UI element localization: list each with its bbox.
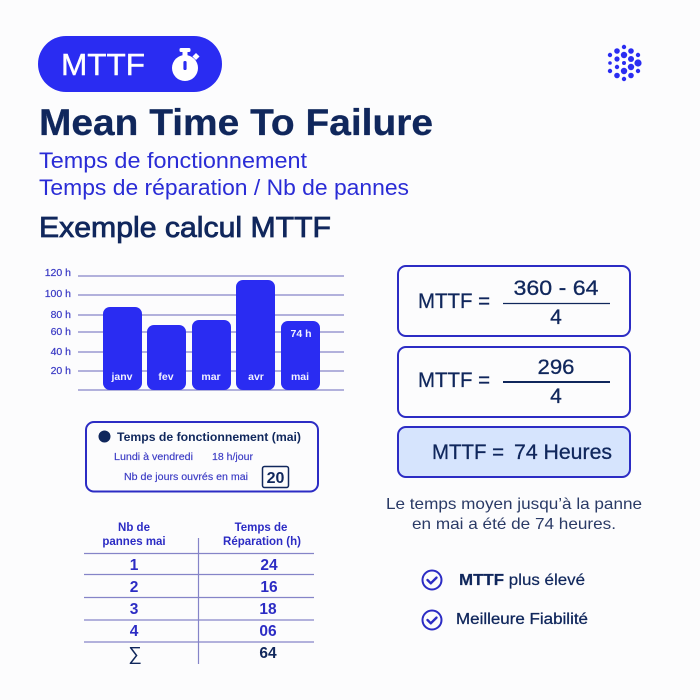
bar chart (45, 267, 344, 390)
chart axis labels: 60 h (51, 326, 71, 338)
conclusion text: en mai a été de 74 heures. (412, 516, 616, 533)
badge: MTTF pill: MTTF (61, 47, 145, 82)
table values: 3 (130, 601, 139, 618)
chart bars (103, 280, 320, 390)
table values: 16 (260, 579, 278, 596)
chart axis labels: 100 h (45, 288, 71, 300)
formula box 1: 360 - 64 (514, 277, 599, 300)
value box: 20: 20 (267, 470, 284, 487)
chart axis labels: 40 h (51, 346, 71, 358)
badge: MTTF pill (38, 36, 222, 92)
panel: operating time: Nb de jours ouvrés en mai (124, 472, 248, 483)
icon: stopwatch (172, 48, 200, 81)
formula box 2 (398, 347, 630, 417)
icon: check (422, 610, 442, 630)
bar labels: mar (201, 371, 221, 383)
table values: 4 (130, 623, 139, 640)
icon: check (422, 570, 442, 590)
panel: operating time: Temps de fonctionnement (mai) (117, 430, 301, 444)
bar labels (110, 328, 312, 383)
benefit: higher MTTF: MTTF plus élevé (459, 572, 585, 589)
table values: 64 (259, 645, 277, 662)
formula box 2: MTTF = (418, 369, 490, 392)
table header: Réparation (h) (223, 536, 301, 548)
subtitle: Temps de fonctionnement (39, 148, 307, 173)
benefit: better reliability: Meilleure Fiabilité (456, 611, 588, 628)
table values: 2 (130, 579, 138, 596)
conclusion text: Le temps moyen jusqu’à la panne (386, 496, 642, 513)
panel: operating time: 18 h/jour (212, 452, 254, 463)
table values (128, 557, 278, 665)
table header: pannes mai (102, 536, 166, 548)
formula box 2: 4 (550, 385, 562, 408)
conclusion text (386, 496, 642, 533)
table values: 24 (260, 557, 278, 574)
value box: 20 (262, 466, 288, 488)
formula box 1: 4 (550, 306, 562, 329)
formula box 2: 296 (538, 356, 574, 379)
title: Mean Time To Failure (39, 102, 433, 143)
bar labels: mai (291, 371, 309, 383)
heading: example: Exemple calcul MTTF (39, 212, 331, 244)
chart axis labels: 80 h (51, 309, 71, 321)
chart axis labels (45, 267, 71, 377)
formula box 1: MTTF = (418, 290, 490, 313)
repair table (84, 522, 314, 665)
result box: 74 Heures (514, 441, 612, 464)
icon: dotted logo (608, 45, 642, 81)
table header (102, 522, 301, 548)
chart axis labels: 120 h (45, 267, 71, 279)
table header: Nb de (118, 522, 150, 534)
table header: Temps de (235, 522, 287, 534)
benefit: higher MTTF (422, 570, 585, 590)
result box: MTTF = (432, 441, 504, 464)
formula box 1 (398, 266, 630, 336)
bar labels: 74 h (290, 328, 312, 340)
result box (398, 427, 630, 477)
bar labels: avr (248, 371, 264, 383)
table values: 06 (259, 623, 277, 640)
chart axis labels: 20 h (51, 365, 71, 377)
bar labels: janv (110, 371, 133, 383)
panel: operating time (86, 422, 318, 492)
panel: operating time: Lundi à vendredi (114, 452, 193, 463)
bar labels: fev (158, 371, 174, 383)
table values: 1 (130, 557, 139, 574)
subtitle (39, 148, 409, 200)
table values: 18 (259, 601, 277, 618)
table values: ∑ (128, 644, 142, 665)
subtitle: Temps de réparation / Nb de pannes (39, 175, 409, 200)
benefit: better reliability (422, 610, 588, 630)
